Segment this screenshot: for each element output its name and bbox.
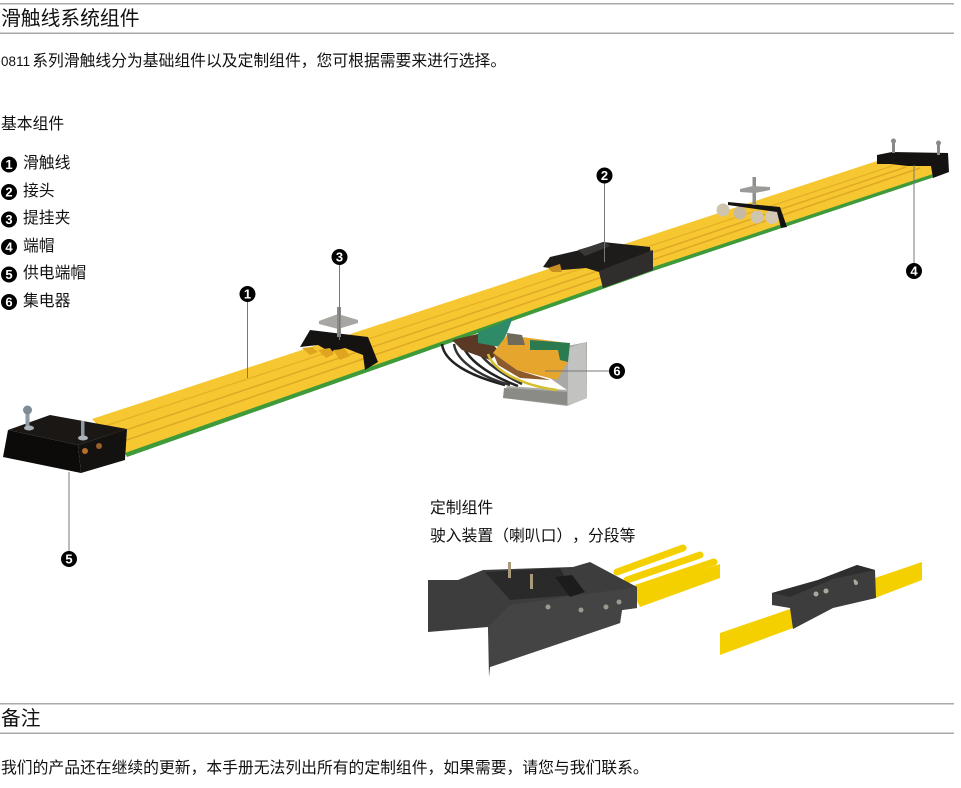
end cap bbox=[877, 138, 949, 178]
callout 6: collector bbox=[545, 363, 625, 379]
callout 5: power feed end cap bbox=[61, 472, 77, 567]
image: section insulator bbox=[720, 562, 922, 655]
custom components text bbox=[430, 499, 636, 545]
legend: basic component list: 5 bbox=[5, 267, 13, 282]
title: 滑触线系统组件 bbox=[1, 8, 139, 30]
callout 6: collector: 6 bbox=[613, 364, 621, 378]
legend: basic component list bbox=[1, 154, 86, 310]
notes heading: 备注 bbox=[1, 708, 41, 730]
image: entry device bbox=[428, 548, 720, 677]
conductor rail bbox=[92, 160, 935, 457]
main product illustration bbox=[3, 138, 949, 473]
callout 2: joint bbox=[596, 168, 612, 262]
power feed end cap bbox=[3, 406, 127, 473]
callout 4: end cap bbox=[906, 165, 922, 279]
legend: basic component list: 滑触线 bbox=[23, 154, 71, 172]
legend: basic component list: 集电器 bbox=[23, 292, 71, 310]
callout 5: power feed end cap: 5 bbox=[65, 552, 73, 566]
legend: basic component list: 2 bbox=[5, 184, 13, 200]
legend: basic component list: 6 bbox=[5, 294, 13, 310]
callout 1: conductor rail bbox=[240, 286, 256, 378]
collector bbox=[442, 317, 587, 406]
custom components text: 驶入装置（喇叭口），分段等 bbox=[430, 527, 636, 545]
second suspension clamp bbox=[716, 177, 787, 228]
suspension clamp bbox=[300, 307, 378, 370]
legend: basic component list: 端帽 bbox=[23, 237, 55, 255]
callout 3: clamp: 3 bbox=[336, 250, 343, 264]
callout 4: end cap: 4 bbox=[910, 264, 918, 278]
heading: basic components: 基本组件 bbox=[1, 115, 64, 133]
callout 3: clamp bbox=[332, 249, 348, 340]
legend: basic component list: 4 bbox=[5, 240, 13, 254]
legend: basic component list: 接头 bbox=[23, 182, 55, 200]
legend: basic component list: 提挂夹 bbox=[23, 209, 71, 227]
rail joint bbox=[543, 242, 653, 288]
legend: basic component list: 供电端帽 bbox=[23, 264, 86, 282]
callout 2: joint: 2 bbox=[601, 168, 608, 183]
intro text: 0811系列滑触线分为基础组件以及定制组件，您可根据需要来进行选择。 bbox=[1, 52, 506, 70]
custom components text: 定制组件 bbox=[430, 499, 493, 517]
legend: basic component list: 1 bbox=[5, 157, 13, 172]
legend: basic component list: 3 bbox=[5, 212, 13, 227]
callout 1: conductor rail: 1 bbox=[244, 286, 251, 302]
notes text: 我们的产品还在继续的更新，本手册无法列出所有的定制组件，如果需要，请您与我们联系。 bbox=[1, 759, 649, 777]
